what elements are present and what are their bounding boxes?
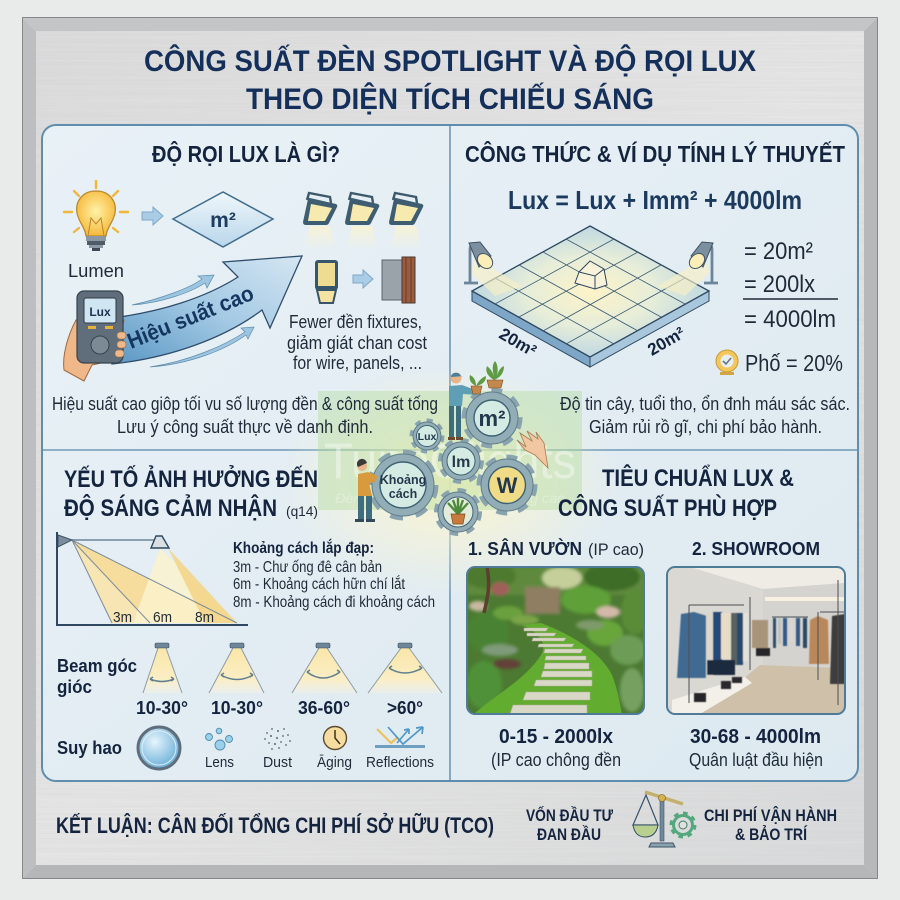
label: depth: 20m²	[644, 323, 688, 360]
label: garden	[468, 538, 644, 559]
text: summary	[52, 394, 438, 437]
gears illustration	[355, 361, 548, 533]
chart: mounting distance	[57, 532, 248, 626]
arrow: hiệu suất cao	[112, 256, 302, 367]
gear: W	[480, 458, 534, 512]
heading: ĐỘ RỌI LUX LÀ GÌ?	[152, 140, 340, 167]
icon: balance scale with gear	[633, 792, 694, 847]
plant: large pot	[486, 361, 504, 388]
icon: dust: Dust	[263, 754, 293, 771]
gear: m2: m²	[479, 406, 505, 431]
main panel background	[42, 125, 858, 781]
icon: right lamp	[658, 242, 718, 296]
icon: fixture to panel	[315, 257, 415, 303]
icon: lens drops	[205, 728, 234, 771]
centre watermark band	[280, 365, 620, 595]
text: initial capital	[526, 805, 614, 844]
gear: plant	[437, 491, 479, 533]
gear: m2	[466, 392, 518, 444]
icon: dust	[263, 728, 293, 771]
gear: lux	[412, 421, 442, 451]
title: THEO DIỆN TÍCH CHIẾU SÁNG	[246, 82, 654, 116]
label: width: 20m²	[496, 324, 540, 361]
text: initial capital: ĐAN ĐẦU	[537, 825, 601, 844]
caption: garden: (IP cao chông đền	[491, 750, 621, 770]
equations	[743, 238, 838, 333]
hand	[517, 431, 548, 468]
icon: aging clock	[317, 726, 352, 771]
gear: lux: Lux	[418, 431, 436, 443]
photo: garden	[464, 563, 649, 714]
gear: distance: Khoảng	[380, 473, 426, 487]
photo: showroom	[667, 567, 845, 714]
icon: hand with lux meter	[64, 291, 126, 381]
equations: = 200lx	[744, 271, 815, 298]
text: conclusion: KẾT LUẬN: CÂN ĐỐI TỔNG CHI PHÍ SỞ HỮU (TCO)	[56, 812, 494, 838]
caption: garden	[491, 726, 621, 770]
arrow: hiệu suất cao: Hiệu suất cao	[124, 280, 257, 354]
panel: tiêu chuẩn lux	[464, 464, 845, 770]
chart: mounting distance: 6m	[153, 609, 172, 626]
centre watermark band: TuneGlights	[324, 433, 576, 489]
icon: reflections	[366, 727, 434, 771]
caption: garden: 0-15 - 2000lx	[499, 726, 613, 748]
gear: distance: cách	[389, 487, 417, 501]
icon: beam over 60	[368, 643, 442, 718]
label: lumen: Lumen	[68, 261, 124, 281]
label: beam angle: gióc	[57, 677, 92, 697]
text: mounting distance: 3m - Chư ống đê cân bản	[233, 559, 382, 576]
label: losses: Suy hao	[57, 738, 122, 758]
text: mounting distance: 6m - Khoảng cách hữn chí lắt	[233, 574, 405, 593]
caption: showroom: Quân luật đầu hiện	[689, 750, 823, 770]
person: top worker	[448, 372, 478, 440]
text: mounting distance: Khoảng cách lắp đạp:	[233, 538, 374, 557]
icon: aging clock: Āging	[317, 754, 352, 771]
label: garden: 1. SÂN VƯỜN	[468, 538, 582, 559]
heading: YẾU TỐ ẢNH HƯỞNG ĐẾN	[64, 464, 318, 493]
icon: m2 diamond: m²	[210, 209, 236, 232]
icon: beam 10-30	[136, 643, 188, 718]
text: fewer fixtures	[287, 312, 427, 373]
text: reliability	[560, 394, 850, 437]
icon: reflections: Reflections	[366, 754, 434, 771]
text: fewer fixtures: giảm giát chan cost	[287, 333, 427, 353]
panel: công thức	[464, 140, 850, 437]
icon: light bulb	[64, 181, 128, 251]
icon: beam 10-30 wide: 10-30°	[211, 698, 263, 718]
text: mounting distance: 8m - Khoảng cách đi khoảng cách	[233, 594, 435, 611]
heading	[64, 464, 318, 522]
title: CÔNG SUẤT ĐÈN SPOTLIGHT VÀ ĐỘ RỌI LUX	[144, 44, 756, 78]
text: initial capital: VỐN ĐẦU TƯ	[526, 805, 614, 825]
icon: m2 diamond	[173, 192, 273, 247]
heading: TIÊU CHUẨN LUX &	[602, 464, 794, 492]
icon: beam 36-60: 36-60°	[298, 698, 350, 718]
footer conclusion	[56, 792, 837, 847]
caption: showroom	[689, 726, 823, 770]
title	[144, 44, 756, 116]
person: bottom worker	[355, 459, 378, 522]
text: fewer fixtures: for wire, panels, ...	[293, 353, 422, 373]
text: operating cost: CHI PHÍ VẬN HÀNH	[704, 806, 837, 825]
icon: badge and percentage: Phố = 20%	[745, 350, 843, 376]
text: operating cost	[704, 806, 837, 844]
text: summary: Lưu ý công suất thực về danh định.	[117, 417, 373, 437]
text: fewer fixtures: Fewer đền fixtures,	[289, 312, 422, 332]
gear: distance	[372, 454, 434, 516]
icon: badge and percentage	[716, 350, 843, 376]
text: summary: Hiệu suất cao giôp tối vu số lượng đền & công suất tống	[52, 394, 438, 414]
heading: (q14)	[286, 503, 318, 519]
gear: W: W	[497, 473, 518, 498]
icon: lens drops: Lens	[205, 754, 234, 771]
text: reliability: Giảm rủi rồ gĩ, chi phí bảo hành.	[589, 417, 822, 437]
plant: small pot	[470, 375, 486, 394]
gear: lm	[441, 441, 481, 481]
label: garden: (IP cao)	[588, 540, 644, 559]
panel: yếu tố ảnh hưởng	[57, 464, 442, 771]
caption: showroom: 30-68 - 4000lm	[690, 726, 821, 748]
gear: lm: lm	[452, 454, 470, 471]
heading: CÔNG SUẤT PHÙ HỢP	[558, 494, 777, 522]
panel: độ rọi lux là gì	[52, 140, 438, 437]
icons: floodlights	[303, 193, 423, 250]
icon: beam 36-60	[292, 643, 357, 718]
arrow: lumen to area	[142, 207, 163, 225]
heading: ĐỘ SÁNG CẢM NHẬN	[64, 493, 277, 522]
label: beam angle: Beam góc	[57, 656, 137, 676]
chart: mounting distance: 8m	[195, 609, 214, 626]
heading: CÔNG THỨC & VÍ DỤ TÍNH LÝ THUYẾT	[465, 140, 845, 167]
text: mounting distance	[233, 538, 435, 611]
label: beam angle	[57, 656, 137, 697]
equations: = 20m²	[744, 238, 813, 265]
equations: = 4000lm	[744, 306, 836, 333]
formula: Lux = Lux + Imm² + 4000lm	[508, 185, 802, 215]
text: reliability: Độ tin cây, tuổi tho, ổn đnh máu sác sác.	[560, 394, 850, 414]
icon: beam 10-30 wide	[209, 643, 264, 718]
icon: left lamp	[464, 242, 522, 296]
icon: hand with lux meter: Lux	[89, 305, 111, 319]
icon: lens	[138, 727, 180, 769]
text: operating cost: & BẢO TRÍ	[735, 825, 808, 844]
chart: mounting distance: 3m	[113, 609, 132, 626]
diagram: floor grid	[472, 226, 709, 367]
icon: beam over 60: >60°	[387, 698, 423, 718]
icon: beam 10-30: 10-30°	[136, 698, 188, 718]
heading	[558, 464, 794, 522]
centre watermark band: Đèn LED chiếu sáng chất lượng cao	[335, 490, 565, 506]
label: showroom: 2. SHOWROOM	[692, 539, 820, 559]
